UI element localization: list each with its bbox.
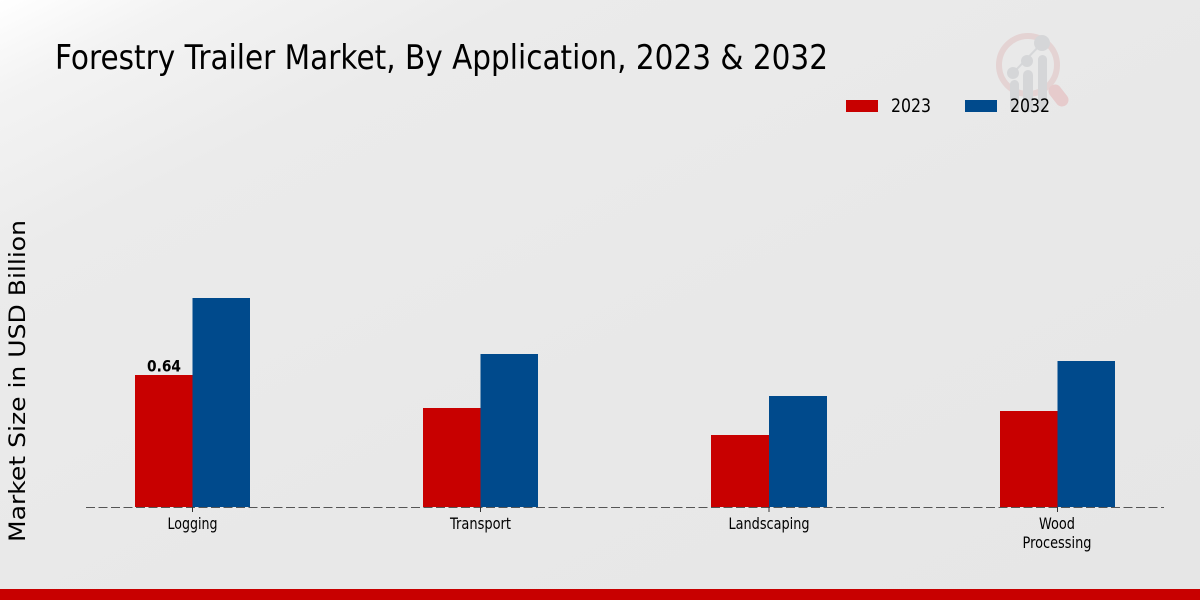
category label: Wood Processing: Wood xyxy=(1039,514,1075,533)
category label: Wood Processing: Processing xyxy=(1022,533,1092,552)
value label: 0.64: 0.64 xyxy=(147,356,181,376)
y-axis label: Market Size in USD Billion xyxy=(5,220,31,542)
legend: 2023 xyxy=(846,95,931,117)
legend: 2032 xyxy=(965,95,1050,117)
legend xyxy=(846,95,1050,117)
baseline xyxy=(86,506,1164,508)
bar chart xyxy=(86,298,1164,552)
category label: Landscaping: Landscaping xyxy=(728,514,810,533)
title: Forestry Trailer Market, By Application, 2023 & 2032 xyxy=(55,38,828,77)
bars: Wood Processing xyxy=(1000,361,1115,507)
legend: 2032: 2032 xyxy=(1010,95,1050,117)
category label: Transport: Transport xyxy=(449,514,511,533)
category label: Wood Processing xyxy=(1022,514,1092,552)
legend: 2023: 2023 xyxy=(891,95,931,117)
bars: Logging xyxy=(135,298,250,507)
footer bar xyxy=(0,589,1200,600)
bars: Landscaping xyxy=(711,396,827,507)
bars: Transport xyxy=(423,354,538,507)
category label: Logging: Logging xyxy=(168,514,218,533)
watermark logo icon xyxy=(999,35,1062,112)
